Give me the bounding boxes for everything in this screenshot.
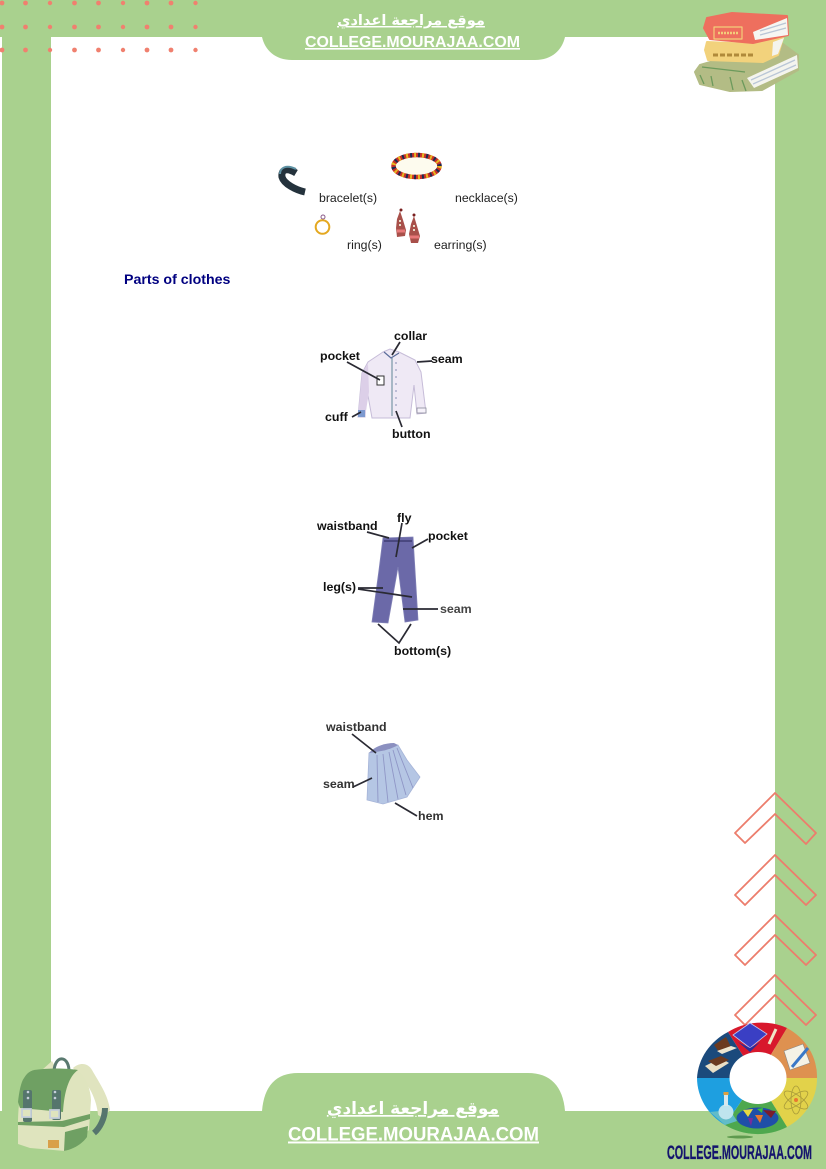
shirt labels: seam [431,352,463,366]
icon: subject wheel [697,1023,817,1138]
bottom banner text: COLLEGE.MOURAJAA.COM [288,1124,539,1146]
icon: backpack [18,1059,110,1151]
trousers labels: bottom(s) [394,644,451,658]
skirt labels: hem [418,809,443,823]
icon: bracelet [280,167,305,192]
trousers labels [316,511,472,658]
shirt labels: cuff [325,410,349,424]
trousers labels: leg(s) [323,580,356,594]
top banner text [305,12,520,51]
skirt labels: seam [323,777,355,791]
label: earring: earring(s) [434,238,487,252]
shirt labels: collar [394,329,427,343]
trousers leader lines [358,523,438,643]
icon: ring [316,215,329,234]
icon: stack of books [695,13,798,91]
shirt labels [320,329,463,441]
diagram: skirt [323,720,443,823]
top banner text: COLLEGE.MOURAJAA.COM [305,34,520,51]
trousers labels: waistband [316,519,378,533]
jewellery group [280,155,518,252]
shirt body [358,349,426,418]
trousers labels: pocket [428,529,468,543]
icon: necklace [394,155,440,177]
bottom banner text: موقع مراجعة اعدادي [327,1099,499,1119]
skirt shape [367,745,420,804]
graduation cap [733,1023,776,1052]
books on dark blue [705,1037,737,1073]
trousers labels: seam [440,602,472,616]
label: bracelet: bracelet(s) [319,191,377,205]
globe map [736,1108,778,1128]
bottom banner text [288,1099,539,1146]
chevron arrows [735,793,816,1025]
skirt labels [323,720,443,823]
atom [782,1086,810,1114]
shirt labels: pocket [320,349,360,363]
shirt leader lines [347,342,432,427]
trousers labels: fly [397,511,412,525]
decorative dot grid [0,1,198,52]
flask [718,1092,734,1120]
top banner text: موقع مراجعة اعدادي [337,12,485,30]
skirt labels: waistband [325,720,387,734]
hole [730,1052,786,1104]
skirt leader lines [352,734,417,816]
diagram: trousers [316,511,472,658]
label: necklace: necklace(s) [455,191,518,205]
heading: parts of clothes: Parts of clothes [124,272,231,288]
trousers shape [372,537,418,623]
diagram: shirt [320,329,463,441]
icon: earrings [396,208,420,243]
shirt labels: button [392,427,431,441]
paper and pen [784,1044,810,1070]
label: ring: ring(s) [347,238,382,252]
